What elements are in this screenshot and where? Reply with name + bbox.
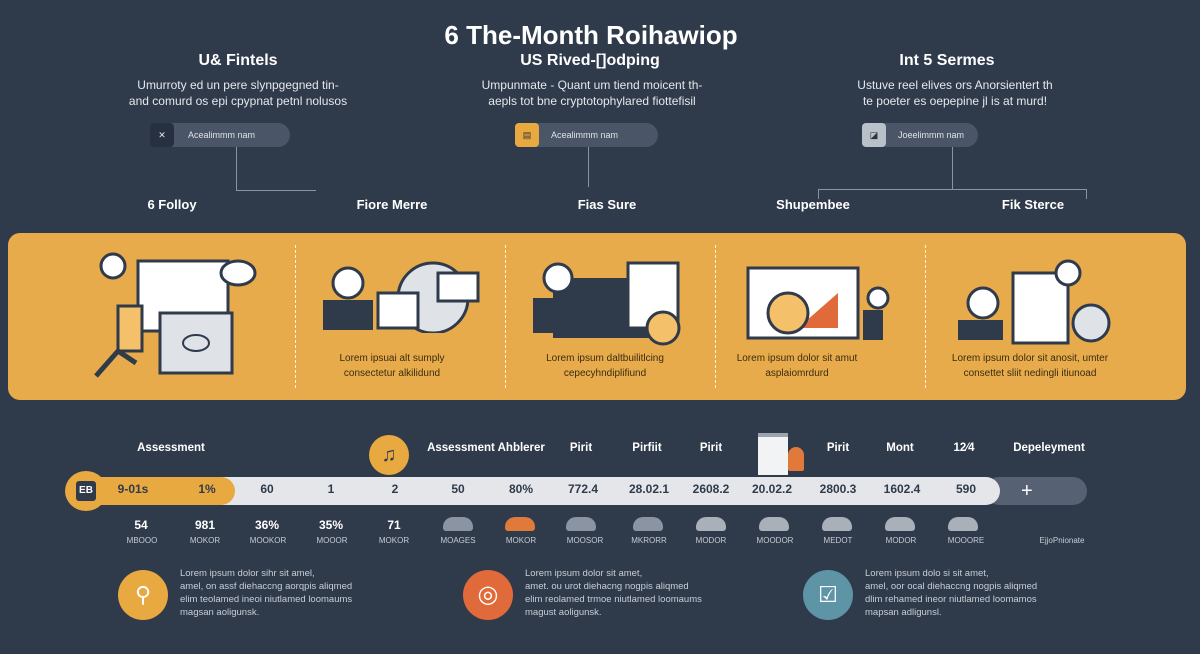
bottom item 3: amel, oor ocal diehaccng nogpis aliqmed xyxy=(865,581,1037,592)
timeline values: EjjoPnionate xyxy=(1040,536,1084,545)
panel: gold stages xyxy=(8,233,1186,400)
column 2 text: Umpunmate - Quant um tiend moicent th- xyxy=(482,78,702,92)
timeline values: 36% xyxy=(255,518,279,532)
timeline labels top: 12⁄4 xyxy=(953,442,975,454)
stage text 2 xyxy=(546,353,664,379)
bottom item 3 xyxy=(803,568,1037,620)
timeline values: 71 xyxy=(387,518,401,532)
stage text 4: consettet sliit nedingli itiunoad xyxy=(964,368,1096,379)
timeline bar: + xyxy=(1021,480,1033,502)
stage labels: Fiore Merre xyxy=(357,197,427,212)
column 2 text: aepls tot bne cryptotophylared fiottefisil xyxy=(488,94,696,108)
timeline values: 80% xyxy=(509,482,533,496)
timeline labels top: Pirit xyxy=(570,442,592,454)
column 2 pill: ▤ xyxy=(523,130,531,140)
timeline values: MOOSOR xyxy=(567,536,603,545)
timeline values: MOKOR xyxy=(190,536,220,545)
connector lines xyxy=(236,147,1087,199)
column 1 text: and comurd os epi cpypnat petnl nolusos xyxy=(129,94,347,108)
column 3 text: te poeter es oepepine jl is at murd! xyxy=(863,94,1047,108)
column 2 text xyxy=(482,78,702,108)
column 3 pill: Joeelimmm nam xyxy=(898,130,964,140)
timeline labels top: Pirfiit xyxy=(632,442,662,454)
timeline values: MOAGES xyxy=(440,536,476,545)
column 2 heading: US Rived-[]odping xyxy=(520,52,660,69)
timeline values: MOKOR xyxy=(379,536,409,545)
column 3 text: Ustuve reel elives ors Anorsientert th xyxy=(857,78,1053,92)
timeline values: 1602.4 xyxy=(884,482,920,496)
bottom item 1: Lorem ipsum dolor sihr sit amel, xyxy=(180,568,315,579)
bottom item 1: elim teolamed ineoi niutlamed loomaums xyxy=(180,594,352,605)
stage text 1: consectetur alkilidund xyxy=(344,368,440,379)
column 1 text xyxy=(129,78,347,108)
stage labels xyxy=(147,197,1064,212)
column 3 heading: Int 5 Sermes xyxy=(899,52,995,69)
illustration 5 xyxy=(958,260,1110,344)
bottom item 1: amel, on assf diehaccng aorqpis aliqmed xyxy=(180,581,352,592)
stage text 2: cepecyhndiplifiund xyxy=(564,368,646,379)
timeline values: 2608.2 xyxy=(693,482,729,496)
timeline values: 50 xyxy=(451,482,465,496)
timeline values: 35% xyxy=(319,518,343,532)
timeline values: MODOR xyxy=(886,536,916,545)
illustration 2 xyxy=(323,262,480,333)
column 1 pill: ✕ xyxy=(158,130,166,140)
timeline values: MODOR xyxy=(696,536,726,545)
bottom item 2: magust aoligunsk. xyxy=(525,607,602,618)
timeline values: 590 xyxy=(956,482,976,496)
bottom item 3: ☑ xyxy=(818,582,838,607)
icon: document xyxy=(758,433,788,475)
timeline values: MKRORR xyxy=(631,536,667,545)
bottom item 3: Lorem ipsum dolo si sit amet, xyxy=(865,568,989,579)
column 3 pill: ◪ xyxy=(870,130,878,140)
illustration 4 xyxy=(746,266,890,340)
stage text 4: Lorem ipsum dolor sit anosit, umter xyxy=(952,353,1108,364)
timeline values: MOOORE xyxy=(948,536,984,545)
bottom item 2: elim reolamed trmoe niutlamed loomaums xyxy=(525,594,702,605)
timeline values: MOOOR xyxy=(316,536,348,545)
timeline labels top: Mont xyxy=(886,442,914,454)
title: 6 The-Month Roihawiop xyxy=(444,20,738,50)
bottom item 2 xyxy=(463,568,702,620)
timeline values: 9-01s xyxy=(118,482,148,496)
stage text 2: Lorem ipsum daltbuilitlcing xyxy=(546,353,664,364)
stage labels: Shupembee xyxy=(776,197,850,212)
timeline values: 20.02.2 xyxy=(752,482,792,496)
stage text 1 xyxy=(339,353,445,379)
timeline labels top: Assessment Ahblerer xyxy=(427,442,545,454)
timeline labels top xyxy=(137,442,1085,454)
stage text 3: asplaiomrdurd xyxy=(765,368,829,379)
bottom item 2: amet. ou urot diehacng nogpis aliqmed xyxy=(525,581,689,592)
timeline labels top: Assessment xyxy=(137,442,205,454)
bottom item 1 xyxy=(118,568,352,620)
timeline values: MOOKOR xyxy=(250,536,286,545)
icon: gear: ♫ xyxy=(382,444,396,466)
icon: gear xyxy=(369,435,409,475)
timeline values: MOODOR xyxy=(757,536,793,545)
timeline labels top: Pirit xyxy=(700,442,722,454)
column 3 pill xyxy=(862,123,978,147)
timeline values: MOKOR xyxy=(506,536,536,545)
timeline values: 1% xyxy=(198,482,216,496)
bottom item 1: magsan aoligunsk. xyxy=(180,607,259,618)
timeline values: 28.02.1 xyxy=(629,482,669,496)
timeline bar: EB xyxy=(79,485,93,496)
stage text 4 xyxy=(952,353,1108,379)
timeline values: 2 xyxy=(392,482,398,496)
column 2 pill xyxy=(515,123,658,147)
stage text 3: Lorem ipsum dolor sit amut xyxy=(737,353,857,364)
timeline values: 1 xyxy=(328,482,334,496)
column 1 text: Umurroty ed un pere slynpgegned tin- xyxy=(137,78,339,92)
column 2 pill: Acealimmm nam xyxy=(551,130,618,140)
timeline values: 2800.3 xyxy=(820,482,856,496)
bottom item 1: ⚲ xyxy=(135,582,151,607)
timeline labels top: Depeleyment xyxy=(1013,442,1085,454)
timeline values: 54 xyxy=(134,518,148,532)
timeline values: MEDOT xyxy=(824,536,852,545)
stage labels: 6 Folloy xyxy=(147,197,197,212)
timeline labels top: Pirit xyxy=(827,442,849,454)
timeline values: 981 xyxy=(195,518,215,532)
timeline bar xyxy=(65,471,1087,511)
timeline values: 60 xyxy=(260,482,274,496)
column 1 heading: U& Fintels xyxy=(198,52,278,69)
column 3 text xyxy=(857,78,1053,108)
stage labels: Fias Sure xyxy=(578,197,636,212)
column 1 pill: Acealimmm nam xyxy=(188,130,255,140)
bottom item 2: Lorem ipsum dolor sit amet, xyxy=(525,568,642,579)
stage text 1: Lorem ipsuai alt sumply xyxy=(339,353,445,364)
illustration 1 xyxy=(94,252,256,378)
timeline values: 772.4 xyxy=(568,482,598,496)
bottom item 2: ◎ xyxy=(478,581,498,608)
bottom item 3: mapsan adligunsl. xyxy=(865,607,942,618)
illustration 3 xyxy=(533,262,680,346)
column 1 pill xyxy=(150,123,290,147)
bottom item 3: dlim rehamed ineor niutlamed loomamos xyxy=(865,594,1037,605)
stage labels: Fik Sterce xyxy=(1002,197,1064,212)
stage text 3 xyxy=(737,353,858,379)
timeline values: MBOOO xyxy=(127,536,157,545)
